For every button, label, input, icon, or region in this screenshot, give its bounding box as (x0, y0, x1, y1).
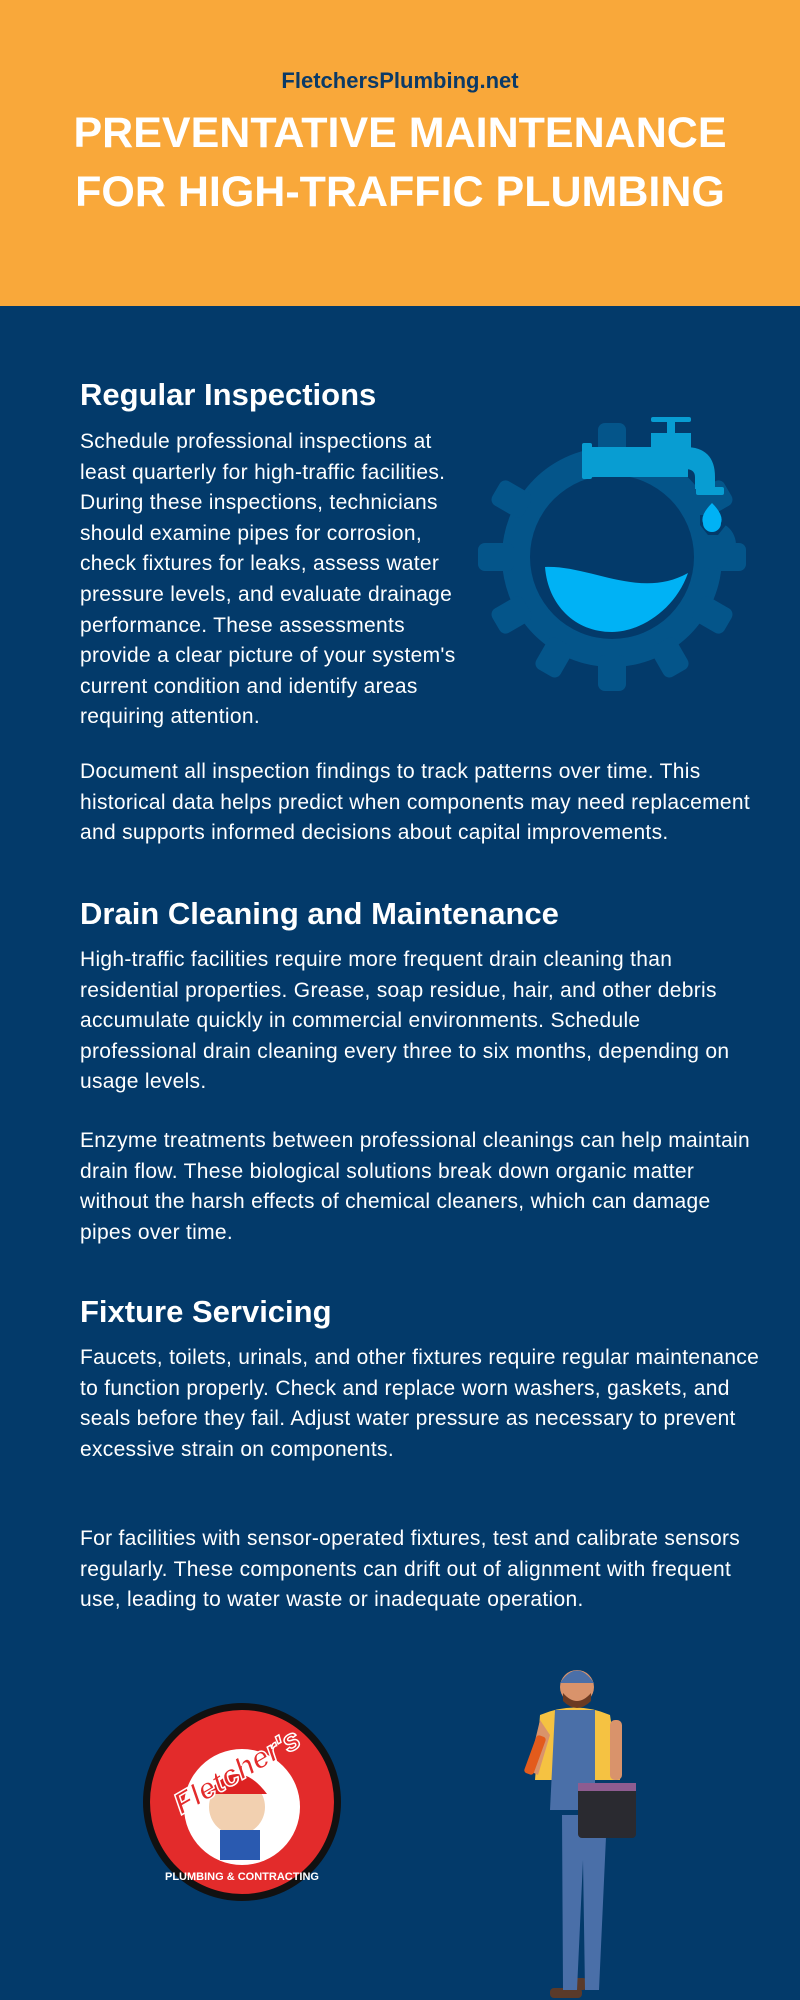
heading: regular inspections: Regular Inspections (80, 377, 376, 412)
text: inspections paragraph 2: Document all inspection findings to track patterns over time. This (80, 760, 701, 783)
heading: fixture servicing: Fixture Servicing (80, 1294, 332, 1329)
icon: gear with faucet (478, 417, 746, 691)
text: drain paragraph 2: drain flow. These biological solutions break down organic matter (80, 1160, 694, 1183)
text: inspections paragraph 1: least quarterly for high-traffic facilities. (80, 461, 445, 484)
text: inspections paragraph 2: historical data helps predict when components may need replacement (80, 791, 750, 814)
text: inspections paragraph 2 (80, 760, 750, 844)
title (74, 109, 726, 216)
text: drain paragraph 2: without the harsh effects of chemical cleaners, which can damage (80, 1190, 710, 1213)
text: inspections paragraph 1: Schedule professional inspections at (80, 430, 432, 453)
text: inspections paragraph 1: During these inspections, technicians (80, 491, 438, 514)
text: drain paragraph 1: residential properties. Grease, soap residue, hair, and other debris (80, 979, 717, 1002)
text: inspections paragraph 1: pressure levels, and evaluate drainage (80, 583, 452, 606)
header banner (0, 0, 800, 306)
text: drain paragraph 1 (80, 948, 729, 1093)
text: fixture paragraph 2: For facilities with sensor-operated fixtures, test and calibrate sensors (80, 1527, 740, 1550)
text: inspections paragraph 1: should examine pipes for corrosion, (80, 522, 422, 545)
logo: Fletcher's: PLUMBING & CONTRACTING (165, 1871, 319, 1883)
text: drain paragraph 1: professional drain cleaning every three to six months, depending on (80, 1040, 729, 1063)
text: drain paragraph 1: usage levels. (80, 1070, 206, 1093)
text: drain paragraph 2: Enzyme treatments between professional cleanings can help maintain (80, 1129, 750, 1152)
text: inspections paragraph 1: provide a clear picture of your system's (80, 644, 456, 667)
text: inspections paragraph 2: and supports informed decisions about capital improvements. (80, 821, 669, 844)
title: PREVENTATIVE MAINTENANCE (74, 109, 726, 157)
illustration: plumber (524, 1670, 636, 1998)
text: inspections paragraph 1: requiring attention. (80, 705, 260, 728)
title: FOR HIGH-TRAFFIC PLUMBING (75, 168, 725, 216)
text: fixture paragraph 1: excessive strain on components. (80, 1438, 394, 1461)
text: inspections paragraph 1: current condition and identify areas (80, 675, 418, 698)
text: drain paragraph 2: pipes over time. (80, 1221, 233, 1244)
text: fixture paragraph 1 (80, 1346, 759, 1461)
text: fixture paragraph 2: regularly. These components can drift out of alignment with frequent (80, 1558, 731, 1581)
site name: FletchersPlumbing.net (281, 68, 519, 93)
text: fixture paragraph 1: Faucets, toilets, urinals, and other fixtures require regular maintenance (80, 1346, 759, 1369)
text: drain paragraph 1: accumulate quickly in commercial environments. Schedule (80, 1009, 640, 1032)
text: inspections paragraph 1: performance. These assessments (80, 614, 405, 637)
logo: Fletcher's: Fletcher's (168, 1722, 306, 1821)
text: fixture paragraph 1: to function properly. Check and replace worn washers, gaskets, and (80, 1377, 730, 1400)
text: fixture paragraph 2 (80, 1527, 740, 1611)
text: drain paragraph 1: High-traffic facilities require more frequent drain cleaning than (80, 948, 672, 971)
text: drain paragraph 2 (80, 1129, 750, 1244)
text: inspections paragraph 1: check fixtures for leaks, assess water (80, 552, 439, 575)
text: fixture paragraph 2: use, leading to water waste or inadequate operation. (80, 1588, 584, 1611)
logo: Fletcher's (143, 1703, 341, 1901)
text: inspections paragraph 1 (80, 430, 456, 728)
text: fixture paragraph 1: seals before they fail. Adjust water pressure as necessary to prevent (80, 1407, 736, 1430)
heading: drain cleaning: Drain Cleaning and Maintenance (80, 896, 559, 931)
